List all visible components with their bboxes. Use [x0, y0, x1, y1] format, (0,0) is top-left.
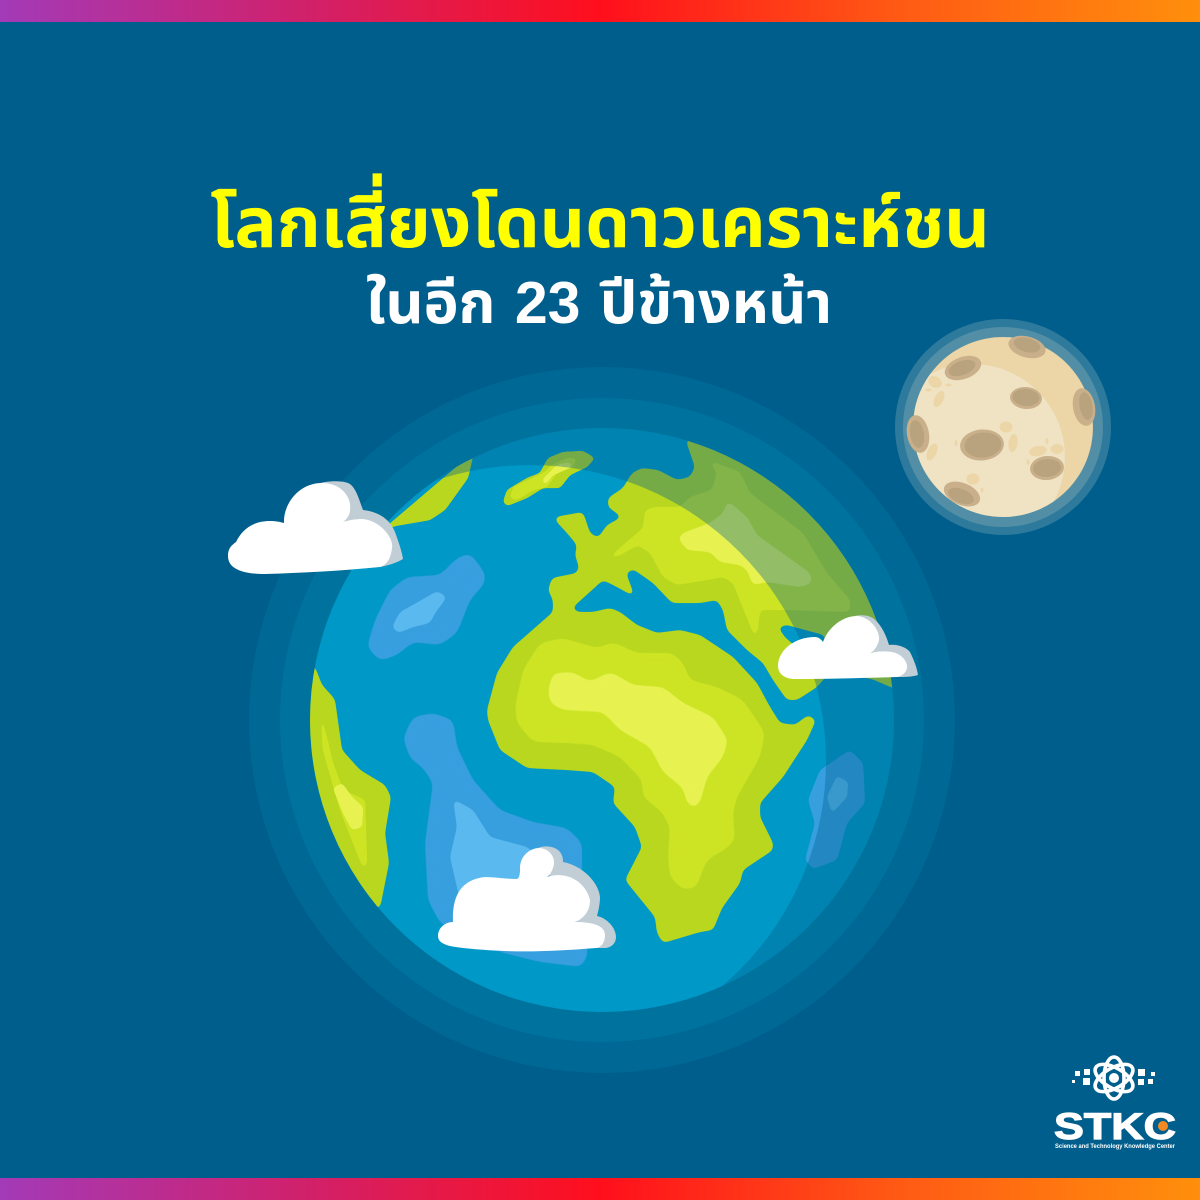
- land: Europe, Asia and Africa base: [487, 441, 892, 942]
- logo tagline: Science and Technology Knowledge Center: [1055, 1144, 1176, 1150]
- logo: STKC: [1054, 1057, 1176, 1150]
- land: northern island: [503, 451, 595, 506]
- land: South America mid elevation: [322, 724, 367, 866]
- title line 1: โลกเสี่ยงโดนดาวเคราะห์ชน: [210, 173, 990, 262]
- moon: [895, 319, 1111, 535]
- moon halo inner: [903, 327, 1103, 527]
- ocean: [300, 420, 900, 1020]
- logo orange dot: [1158, 1121, 1168, 1131]
- earth globe: [310, 428, 894, 1012]
- cloud: upper left: [228, 481, 403, 574]
- land: South America high elevation: [333, 783, 363, 830]
- moon craters: [904, 332, 1098, 511]
- logo wordmark: STKC: [1054, 1106, 1176, 1147]
- ocean inlet: [780, 625, 825, 644]
- bottom gradient bar: [0, 1178, 1200, 1200]
- land: Africa mid elevation: [515, 638, 765, 890]
- title: [210, 173, 990, 336]
- land: Eurasia mid elevation: [608, 460, 850, 638]
- logo pixel squares: [1072, 1069, 1155, 1085]
- deep water: east: [805, 750, 865, 869]
- atmosphere outer ring: [249, 367, 955, 1073]
- land: north-west patch: [390, 458, 472, 527]
- deep water: north-west: [367, 553, 485, 661]
- night-side shadow: [436, 428, 894, 986]
- moon surface: [913, 337, 1093, 517]
- title line 2: ในอีก 23 ปีข้างหน้า: [366, 270, 832, 336]
- top gradient bar: [0, 0, 1200, 22]
- moon halo outer: [895, 319, 1111, 535]
- land: Africa high elevation: [548, 672, 728, 809]
- logo atom icon: [1091, 1057, 1137, 1099]
- cloud: bottom: [438, 846, 616, 951]
- cloud: right: [778, 615, 918, 679]
- deep water: south: [403, 713, 588, 967]
- atmosphere inner ring: [280, 398, 924, 1042]
- moon spots: [924, 374, 1064, 492]
- moon lit area: [914, 364, 1065, 517]
- land: Eurasia high elevation: [678, 501, 812, 587]
- land: South America base: [310, 668, 391, 907]
